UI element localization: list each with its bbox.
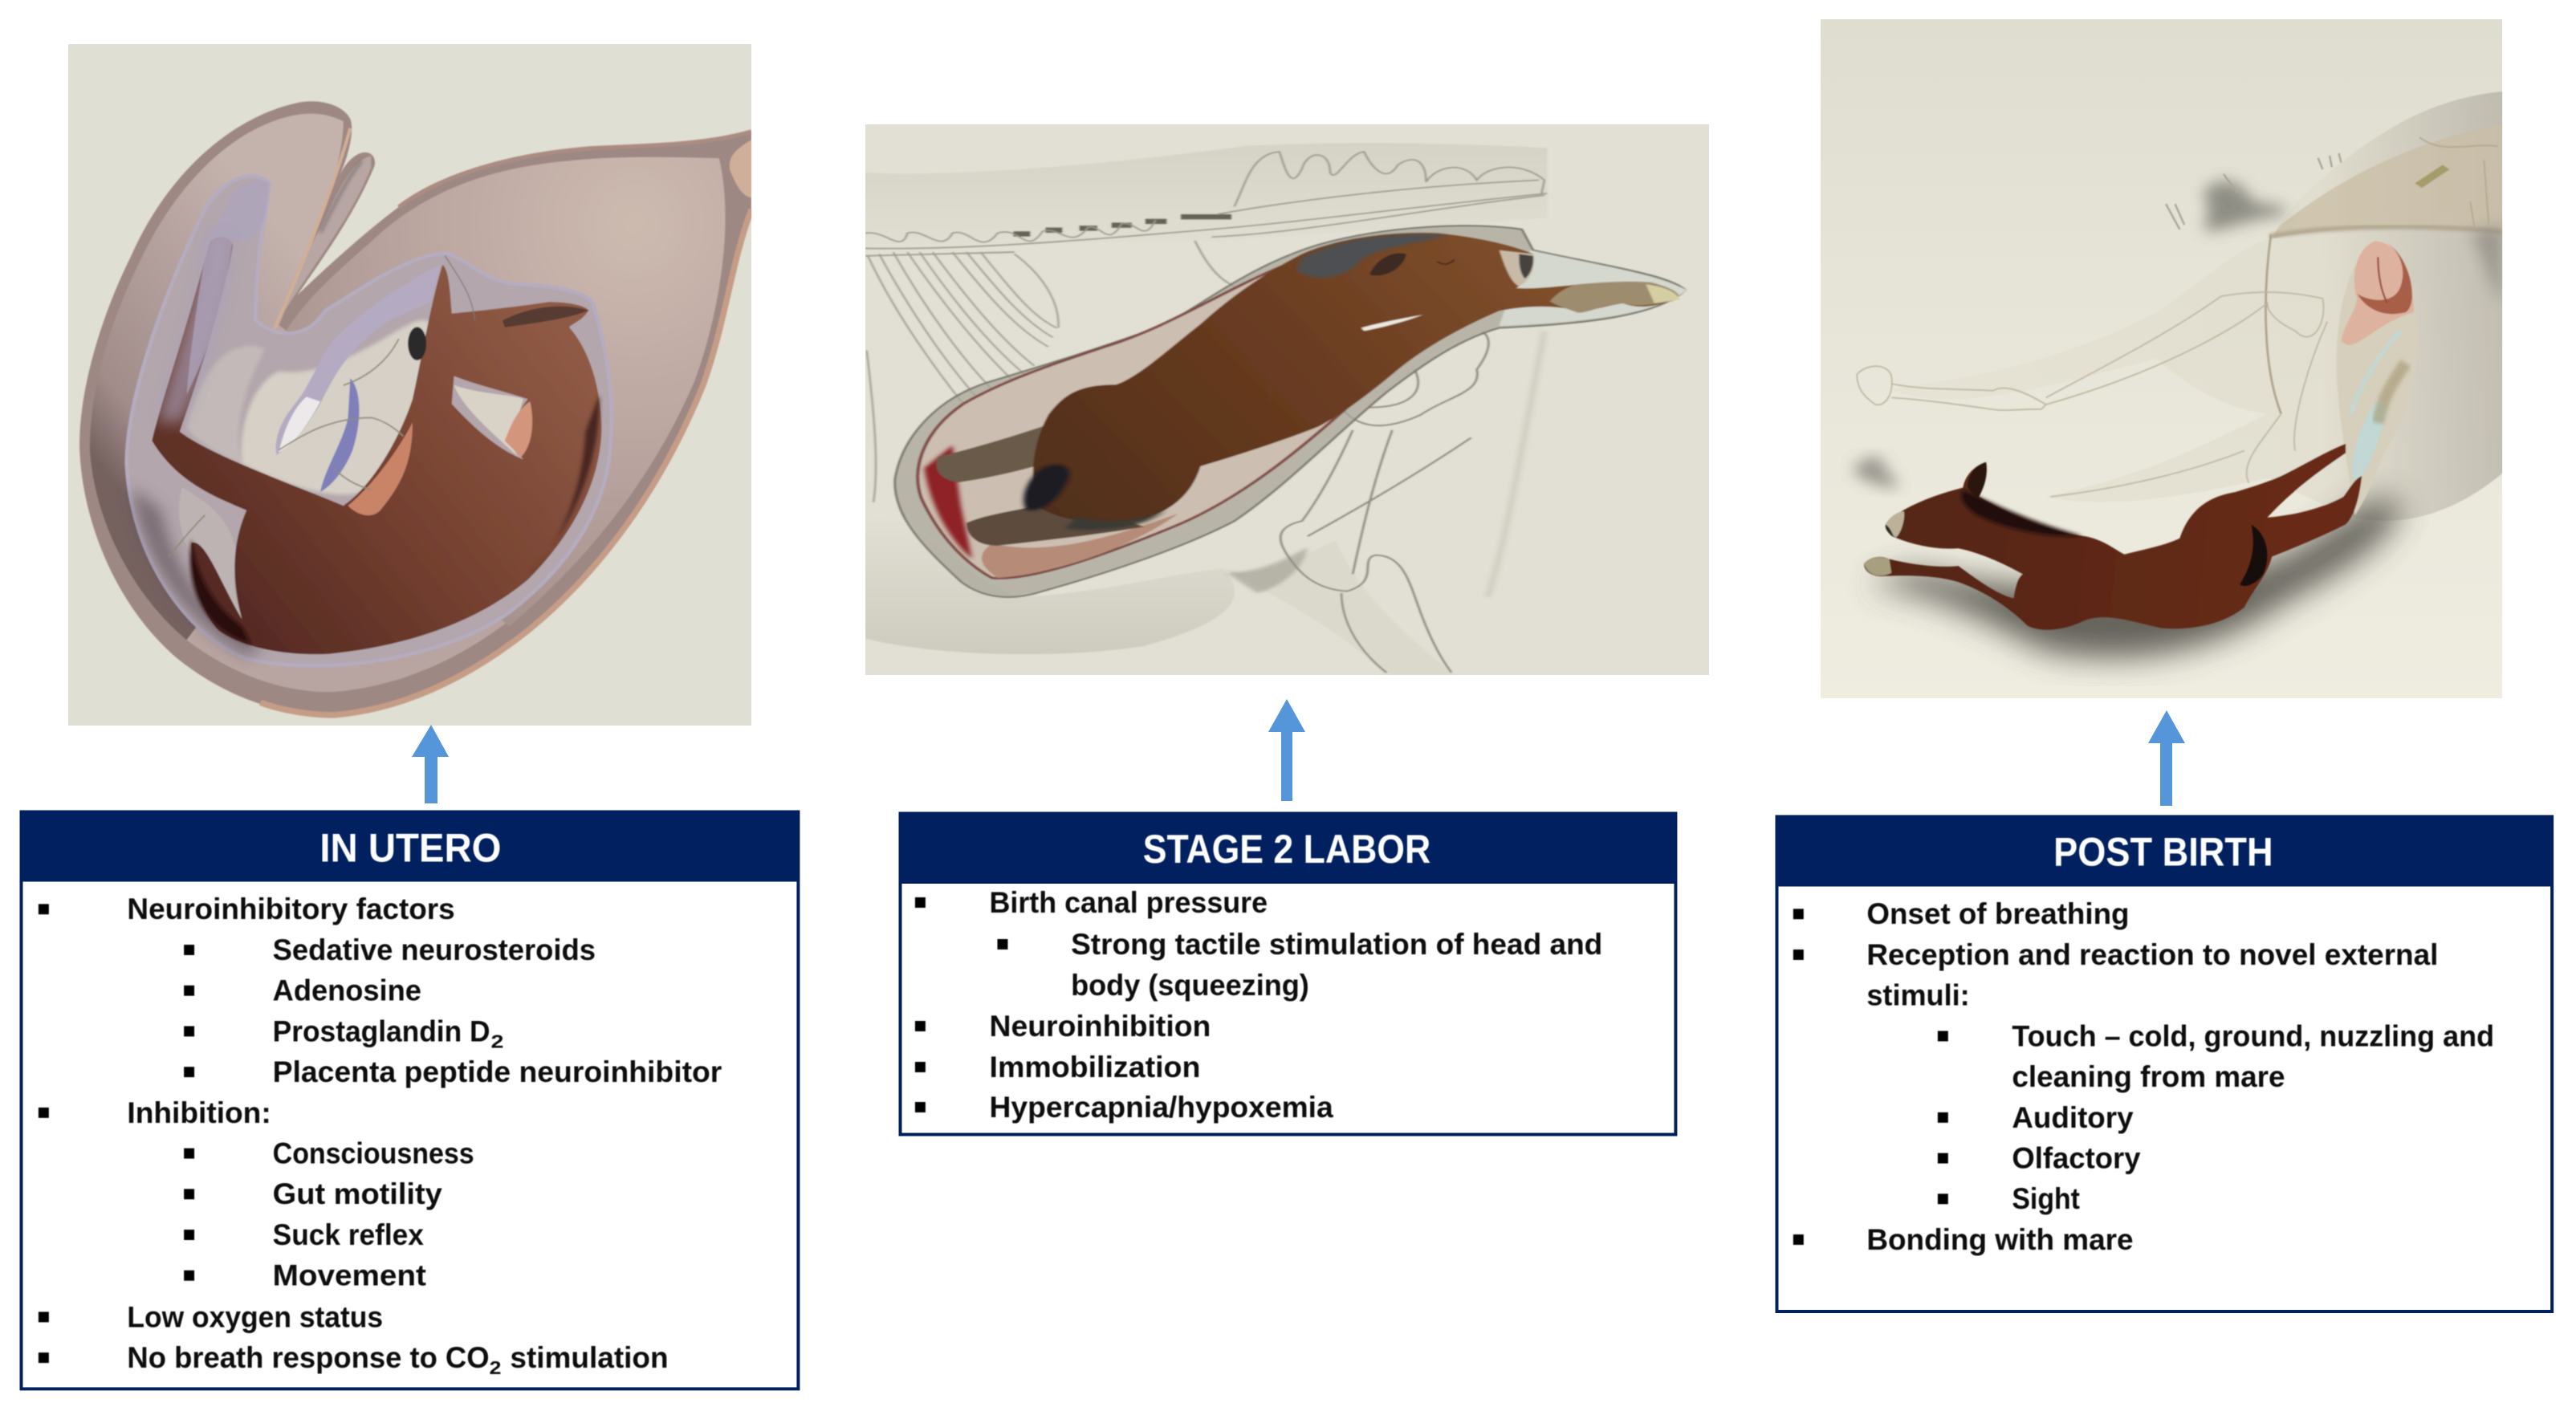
heading: in utero: IN UTERO <box>319 826 501 871</box>
foal mane <box>1961 490 2083 536</box>
foal head shading <box>1296 234 1449 278</box>
foal dark hoof <box>408 327 426 360</box>
arrow: post birth <box>2148 710 2185 806</box>
swirl veil <box>186 346 265 464</box>
bullet list: post birth: stimuli: <box>1866 979 1970 1012</box>
far foreleg <box>276 265 440 455</box>
mare back <box>865 143 1547 245</box>
bullet list: in utero: Inhibition: <box>127 1096 271 1129</box>
bullet list: in utero: stimulation <box>510 1341 669 1374</box>
dark tail <box>1023 465 1069 510</box>
far hind hoof <box>186 181 269 395</box>
bullet list: post birth: cleaning from mare <box>2012 1060 2285 1093</box>
illustration: foal in utero <box>68 44 751 726</box>
placental tissue <box>2352 401 2387 483</box>
blue vessel <box>320 378 360 492</box>
heading: stage 2 labor: STAGE 2 LABOR <box>1143 827 1430 872</box>
bullet list: post birth: Touch – cold, ground, nuzzling and <box>2012 1019 2494 1052</box>
umbilical vessels <box>168 339 403 557</box>
clear sleeve over foreleg <box>1500 250 1687 326</box>
foal muzzle <box>1500 250 1534 287</box>
arrow: in utero <box>412 725 449 803</box>
blurred hoof shadows <box>2203 181 2286 230</box>
bullet list: in utero <box>39 893 722 1378</box>
hind leg veil <box>157 228 238 422</box>
bullet list: in utero: Adenosine <box>273 974 421 1007</box>
bullet list: in utero: Suck reflex <box>273 1218 424 1251</box>
rear leg 2 <box>967 506 1144 546</box>
uterus horn interior <box>90 114 371 640</box>
illustration: foal post birth <box>1821 19 2507 698</box>
foal belly highlight <box>348 422 413 515</box>
uterus outer wall <box>79 101 751 715</box>
bullet list: in utero: Sedative neurosteroids <box>273 933 596 966</box>
foal muzzle <box>503 307 588 327</box>
bullet list: in utero: Neuroinhibitory factors <box>127 893 455 925</box>
secondary horn finger <box>286 156 371 308</box>
bullet list: in utero: Prostaglandin D <box>273 1014 490 1047</box>
mare pelvis dark bone <box>2415 165 2449 188</box>
bullet list: stage 2 labor <box>915 886 1602 1124</box>
foal body <box>152 237 601 654</box>
panel: stage 2 labor <box>899 812 1677 1135</box>
birth canal sac <box>895 226 1686 597</box>
bullet list: post birth: Sight <box>2012 1182 2080 1215</box>
bullet list: stage 2 labor: Birth canal pressure <box>990 886 1268 919</box>
heading: post birth: POST BIRTH <box>2053 830 2273 875</box>
mare limb bones <box>1857 292 2327 497</box>
rear leg 1 <box>936 426 1060 482</box>
uterus lower wall <box>186 620 506 692</box>
foal ear and eye <box>1369 253 1406 275</box>
mare foreleg shading <box>1223 540 1455 674</box>
ribs <box>867 252 1059 502</box>
lower left dark band <box>132 487 265 657</box>
mare hindquarters <box>1889 91 2507 521</box>
bullet list: in utero: Placenta peptide neuroinhibitor <box>273 1055 722 1088</box>
foal muzzle <box>1886 511 1904 537</box>
bullet list: post birth: Reception and reaction to novel external <box>1866 938 2438 971</box>
arrow: stage 2 labor <box>1268 699 1305 801</box>
bullet list: post birth <box>1793 897 2494 1256</box>
bullet list: post birth: Auditory <box>2012 1101 2134 1134</box>
bullet list: stage 2 labor: Immobilization <box>990 1051 1200 1084</box>
bullet list: stage 2 labor: Strong tactile stimulation of head and <box>1071 928 1602 961</box>
peach rim <box>260 209 751 715</box>
vertebrae outline <box>865 152 1547 256</box>
uterus main chamber <box>279 157 725 626</box>
bullet list: in utero: 2 <box>490 1357 501 1378</box>
amnion sac <box>127 176 612 665</box>
foal hoof <box>1550 282 1679 313</box>
foal tail <box>2240 524 2268 586</box>
panel: in utero <box>20 811 800 1389</box>
amniotic fluid opening <box>241 320 433 494</box>
foal hoof <box>1864 557 1891 575</box>
red inner wall <box>918 267 1347 578</box>
foal ground shadow <box>1866 499 2401 657</box>
bullet list: in utero: No breath response to CO <box>127 1341 490 1374</box>
bullet list: post birth: Bonding with mare <box>1866 1223 2134 1256</box>
cervix <box>730 140 751 197</box>
light gap under foal neck <box>1361 315 1423 331</box>
foal body <box>1033 233 1674 523</box>
bullet list: in utero: Low oxygen status <box>127 1300 383 1333</box>
illustration: foal in birth canal <box>865 124 1709 675</box>
pelvic bones <box>1280 331 1488 673</box>
panel: post birth <box>1776 815 2554 1311</box>
mare belly <box>865 516 1235 654</box>
bullet list: in utero: 2 <box>491 1031 503 1051</box>
foal ear <box>1968 462 1987 499</box>
right flank shade <box>2470 225 2502 303</box>
bullet list: in utero: Consciousness <box>273 1137 474 1170</box>
bullet list: stage 2 labor: Hypercapnia/hypoxemia <box>990 1091 1333 1124</box>
foal <box>1864 444 2362 630</box>
foal shadows <box>190 538 251 644</box>
bullet list: stage 2 labor: Neuroinhibition <box>990 1010 1211 1043</box>
bullet list: stage 2 labor: body (squeezing) <box>1071 969 1309 1002</box>
bullet list: in utero: Gut motility <box>273 1177 442 1210</box>
mare upper body band <box>2271 124 2507 240</box>
bullet list: post birth: Olfactory <box>2012 1142 2141 1175</box>
vulva and membranes <box>2337 241 2418 515</box>
spine <box>1013 214 1231 237</box>
bullet list: post birth: Onset of breathing <box>1866 897 2130 930</box>
bullet list: in utero: Movement <box>273 1259 426 1292</box>
